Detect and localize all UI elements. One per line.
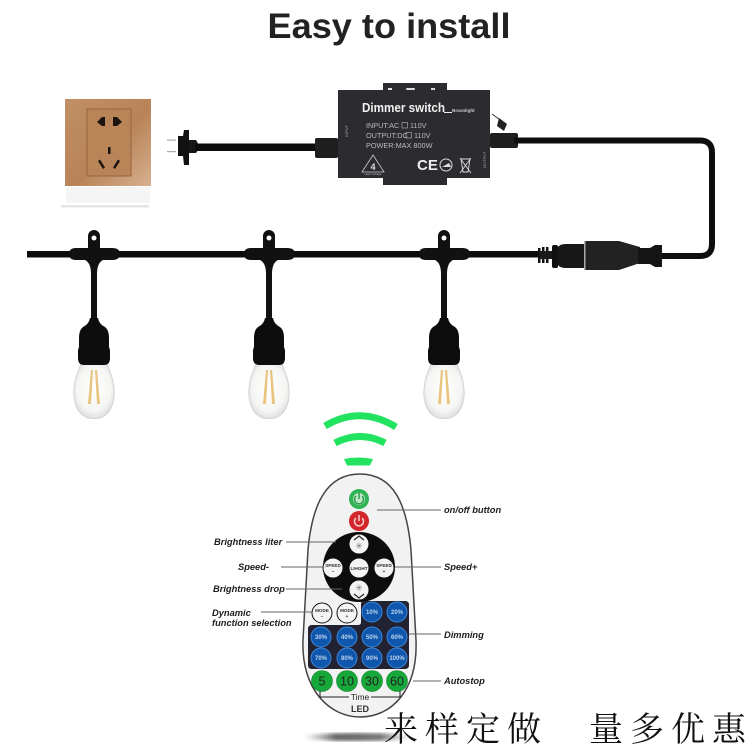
callout: dynamic function selection: Dynamic (212, 608, 252, 618)
mode buttons (312, 603, 357, 623)
power cable with plug (167, 130, 338, 165)
callout: brightness drop (213, 584, 342, 594)
remote body (303, 474, 416, 717)
string light 3 (419, 230, 470, 418)
autostop timer buttons (312, 670, 408, 692)
direction pad: SPEED (325, 563, 341, 568)
dimmer switch box: 4 (370, 162, 376, 172)
off button (349, 511, 369, 531)
dimming buttons: 20% (391, 610, 404, 616)
time bracket: Time (351, 692, 370, 702)
direction pad: ✳ (355, 541, 363, 551)
direction pad (323, 532, 395, 602)
dimmer switch box: CE (417, 157, 438, 174)
autostop timer buttons: 10 (340, 674, 354, 688)
dimming buttons: 90% (366, 656, 379, 662)
dimmer switch box: 110V (410, 121, 427, 130)
title: Easy to install (268, 7, 510, 46)
direction pad: LIHGHT (350, 566, 368, 571)
promo text: 来样定做 (384, 711, 548, 749)
dimmer switch box: POWER:MAX 800W (366, 141, 433, 150)
callout: dynamic function selection: function selection (212, 618, 292, 628)
main light string wire (27, 251, 539, 258)
waterproof connector (538, 241, 662, 270)
direction pad: ✳ (355, 583, 363, 593)
autostop timer buttons: 60 (390, 674, 404, 688)
direction pad: + (383, 569, 386, 574)
mode buttons: MODE (340, 608, 354, 613)
callout: speed plus: Speed+ (444, 562, 478, 572)
callout: on/off button: on/off button (444, 505, 501, 515)
dimmer switch box: 110V (414, 131, 431, 140)
mode buttons: − (321, 614, 324, 619)
dimming buttons (311, 602, 407, 668)
dimming buttons: 60% (391, 635, 404, 641)
direction pad: − (332, 569, 335, 574)
dimming buttons: 30% (315, 635, 328, 641)
dimming buttons: 70% (315, 656, 328, 662)
callout: on/off button (377, 505, 501, 515)
dimmer switch box: Dimmer switch (362, 100, 445, 115)
dimming buttons: 50% (366, 635, 379, 641)
callout: autostop (413, 676, 485, 686)
icon: wall socket (61, 99, 151, 208)
dimmer switch box: INPUT:AC (366, 121, 399, 130)
icon: wireless signal (325, 416, 396, 466)
dimming keypad panel (308, 601, 409, 669)
autostop timer buttons: 5 (319, 674, 326, 688)
time bracket (320, 691, 400, 702)
callout: brightness drop: Brightness drop (213, 584, 285, 594)
dimming buttons: 10% (366, 610, 379, 616)
dimmer switch box: OUTPUT (482, 151, 487, 168)
callout: dimming: Dimming (444, 630, 484, 640)
callout: dimming (409, 630, 484, 640)
callout: speed minus: Speed- (238, 562, 269, 572)
callout: autostop: Autostop (443, 676, 485, 686)
dimmer switch box: INPUT (344, 124, 349, 137)
dimming buttons: 100% (389, 656, 405, 662)
remote shadow (302, 733, 414, 741)
dimmer switch box: Bravolight (452, 108, 475, 113)
callout: speed minus (238, 562, 324, 572)
string light 1 (69, 230, 120, 418)
dimming buttons: 80% (341, 656, 354, 662)
dimmer switch box: High Voltage (364, 172, 382, 176)
dimmer switch box (338, 83, 490, 185)
callout: brightness liter (214, 537, 336, 547)
promo text 2: 量多优惠 (589, 711, 750, 749)
autostop timer buttons: 30 (365, 674, 379, 688)
on button (349, 489, 369, 509)
direction pad: SPEED (376, 563, 392, 568)
callout: brightness liter: Brightness liter (214, 537, 284, 547)
string light 2 (244, 230, 295, 418)
mode buttons: MODE (315, 608, 329, 613)
remote control (303, 474, 416, 717)
mode buttons: + (346, 614, 349, 619)
dimming buttons: 40% (341, 635, 354, 641)
callout: speed plus (395, 562, 478, 572)
callout: dynamic function selection (212, 608, 312, 628)
LED label: LED (351, 704, 370, 714)
dimmer switch box: OUTPUT:DC (366, 131, 408, 140)
output cable loop (490, 114, 712, 256)
